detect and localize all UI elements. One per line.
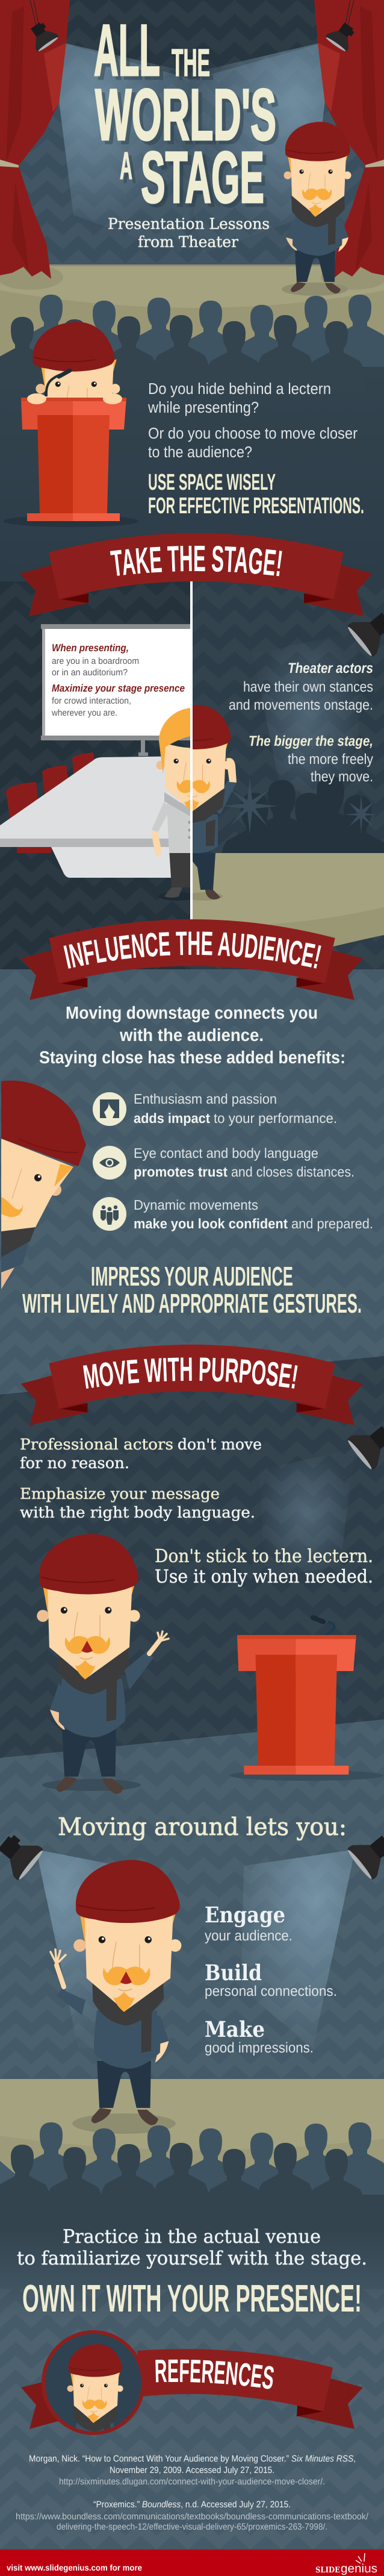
screen text: for crowd interaction,: [52, 696, 131, 706]
character: peeking head: [1, 1081, 86, 1289]
character: half presenter half actor: [152, 705, 237, 901]
spotlight beam: move with purpose: [259, 1449, 355, 1578]
intro questions: [147, 380, 358, 461]
text: don't stick to the lectern: Don't stick to the lectern.: [155, 1546, 373, 1567]
banner: references: [21, 2330, 363, 2435]
list: moving around benefits: good impressions.: [205, 2040, 314, 2056]
section background: moving around: [0, 1719, 384, 2079]
subtitle: [108, 215, 270, 251]
list: moving around benefits: Engage: [205, 1902, 285, 1928]
panel background: boardroom vs stage: [0, 581, 384, 969]
spot lamp: take the stage: [345, 604, 384, 658]
title: STAGE: [141, 136, 264, 218]
spot lamps: moving around: [0, 1827, 384, 1882]
intro questions: Do you hide behind a lectern: [148, 380, 331, 398]
text: professional actors: Professional actors: [20, 1436, 173, 1453]
logo: slidegenius: genius: [341, 2562, 377, 2575]
right curtain: [314, 0, 384, 279]
spot lamp: move with purpose: [345, 1417, 384, 1472]
benefit 3: Dynamic movements: [134, 1197, 258, 1213]
stage floor: lower: [0, 2079, 384, 2193]
title: A: [120, 144, 132, 187]
split divider: [190, 581, 193, 920]
spotlight beams: moving around: [36, 1849, 355, 2048]
spotlight beam: take the stage: [253, 633, 361, 801]
title: ALL: [94, 9, 160, 91]
benefit 1: Enthusiasm and passion: [134, 1091, 277, 1107]
benefit 1: adds impact: [134, 1110, 210, 1126]
audience: hero: [0, 295, 384, 393]
list: moving around benefits: Build: [205, 1960, 262, 1986]
screen text: are you in a boardroom: [52, 656, 139, 666]
references list: November 29, 2009. Accessed July 27, 2015.: [110, 2465, 274, 2475]
benefit 3: [93, 1197, 373, 1231]
callout: use space wisely: [148, 470, 364, 519]
callout: use space wisely: USE SPACE WISELY: [148, 470, 276, 495]
heading: moving around lets you: Moving around lets you:: [58, 1813, 347, 1841]
text: professional actors: for no reason.: [20, 1454, 129, 1472]
section background: lectern: [0, 361, 384, 581]
intro questions: to the audience?: [148, 443, 252, 461]
references list: https://www.boundless.com/communications/textbooks/boundless-communications-textbook/: [16, 2512, 369, 2522]
stage floor: right half: [193, 853, 384, 964]
text: professional actors: don't move: [178, 1436, 262, 1453]
benefit 2: [93, 1145, 355, 1180]
intro questions: while presenting?: [147, 398, 259, 416]
intro text: influence: Staying close has these added benefits:: [39, 1048, 345, 1068]
references list: Morgan, Nick. “How to Connect With Your Audience by Moving Closer.” Six Minutes RSS,: [29, 2454, 356, 2464]
text: don't stick to the lectern: Use it only when needed.: [155, 1566, 373, 1587]
closing text: practice: [17, 2226, 367, 2269]
banner: take the stage: TAKE THE STAGE!: [110, 546, 282, 576]
list: moving around benefits: [205, 1902, 337, 2056]
illustration: hiding behind lectern: [4, 322, 138, 527]
logo: slidegenius: [315, 2553, 377, 2575]
audience silhouettes with camera flashes: [218, 776, 384, 882]
benefit 2: promotes trust: [134, 1164, 228, 1180]
list: moving around benefits: personal connections.: [205, 1983, 337, 1999]
stage floor: hero: [0, 264, 384, 374]
banner: move with purpose: [21, 1345, 363, 1425]
text: professional actors: Emphasize your message: [20, 1485, 220, 1502]
section background: hero: [0, 0, 384, 313]
intro questions: Or do you choose to move closer: [148, 424, 358, 442]
screen text: [51, 642, 185, 718]
lectern: right: [229, 1618, 383, 1781]
left curtain: [0, 0, 70, 279]
intro text: influence: with the audience.: [119, 1026, 264, 1045]
character: waving beside lectern: [37, 1534, 169, 1794]
banner: references: REFERENCES: [155, 2359, 274, 2389]
icon: curtains: [93, 1092, 126, 1126]
references list: http://sixminutes.dlugan.com/connect-with-your-audience-move-closer/.: [59, 2477, 325, 2487]
benefit 3: make you look confident: [134, 1216, 288, 1231]
subtitle: Presentation Lessons: [108, 215, 270, 233]
references list: [16, 2454, 369, 2532]
benefit 1: [93, 1091, 337, 1126]
footer: [0, 2549, 384, 2576]
stage lamp: hero right: [324, 0, 359, 53]
right text: theater actors: [229, 660, 373, 785]
list: moving around benefits: Make: [205, 2017, 265, 2042]
screen text: Maximize your stage presence: [52, 683, 185, 694]
benefit 3: and prepared.: [291, 1216, 373, 1231]
audience: lower: [0, 2122, 384, 2221]
footer: visit www.slidegenius.com for more: [7, 2563, 142, 2572]
text: don't stick to the lectern: [155, 1546, 373, 1587]
text: professional actors: [20, 1436, 262, 1521]
benefit 2: Eye contact and body language: [134, 1145, 318, 1161]
text: professional actors: with the right body language.: [20, 1504, 255, 1521]
section background: closing: [0, 2193, 384, 2549]
title: THE: [172, 41, 210, 84]
screen text: When presenting,: [52, 642, 129, 654]
title: [94, 9, 276, 218]
icon: eye: [93, 1146, 126, 1180]
intro text: influence: Moving downstage connects you: [66, 1004, 318, 1023]
character: presenter in spotlights: [51, 1860, 181, 2134]
benefit 1: to your performance.: [214, 1110, 337, 1126]
section background: influence: [0, 969, 384, 1427]
references list: delivering-the-speech-12/effective-visual-delivery-65/proxemics-263-7998/.: [57, 2522, 327, 2532]
references list: “Proxemics.” Boundless, n.d. Accessed July 27, 2015.: [93, 2499, 291, 2510]
banner: influence the audience: [21, 919, 363, 1000]
stage lamp: hero left: [25, 0, 60, 53]
spotlight beams: hero: [51, 40, 333, 253]
banner: influence the audience: INFLUENCE THE AUDIENCE!: [64, 931, 321, 969]
callout: impress your audience: [22, 1261, 362, 1319]
logo: slidegenius: SLIDE: [315, 2566, 340, 2575]
closing text: practice: to familiarize yourself with the stage.: [17, 2248, 367, 2269]
screen text: or in an auditorium?: [52, 667, 128, 678]
intro text: influence: [39, 1004, 345, 1068]
benefit 2: and closes distances.: [231, 1164, 355, 1180]
list: moving around benefits: your audience.: [205, 1928, 293, 1944]
conference table and chairs: [0, 752, 191, 878]
right text: theater actors: the more freely: [288, 751, 373, 767]
banner: move with purpose: MOVE WITH PURPOSE!: [83, 1358, 297, 1389]
closing text: practice: Practice in the actual venue: [63, 2226, 321, 2248]
character: actor on stage: [282, 122, 351, 296]
banner: take the stage: [20, 533, 373, 616]
section background: move with purpose: [0, 1356, 384, 1758]
screen text: wherever you are.: [51, 708, 117, 718]
projection screen: [41, 624, 191, 756]
icon: people: [93, 1197, 126, 1231]
right text: theater actors: they move.: [311, 769, 373, 785]
subtitle: from Theater: [138, 233, 238, 251]
